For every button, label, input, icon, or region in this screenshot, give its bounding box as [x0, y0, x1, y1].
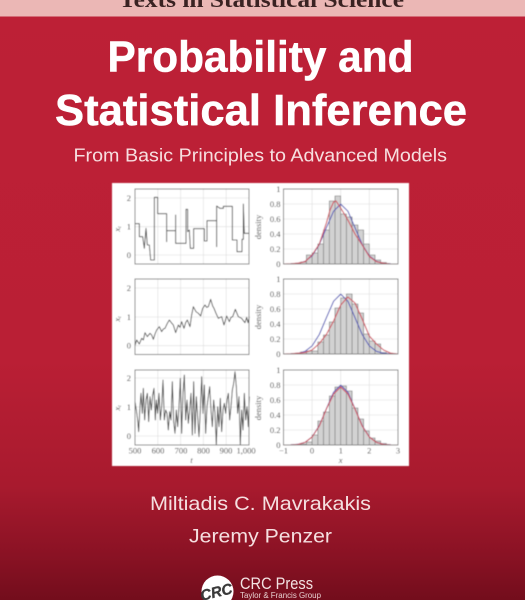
chart: time series 1: t	[117, 226, 123, 228]
chart: density 2: 0.8	[270, 289, 280, 299]
chart: density 2: 1	[276, 274, 280, 284]
subtitle: From Basic Principles to Advanced Models	[74, 146, 447, 166]
chart: time series 3: 1	[127, 402, 131, 412]
authors	[150, 493, 371, 547]
chart: density 1: 0.8	[270, 199, 280, 209]
chart: density 3: 0	[276, 440, 280, 450]
chart: density 3: x	[338, 455, 343, 465]
chart: density 3: 0.2	[270, 425, 280, 435]
chart: time series 3: 600	[152, 446, 164, 456]
chart: density 1: density	[253, 214, 263, 239]
chart: time series 3	[112, 370, 256, 465]
chart: density 1: 0.2	[270, 244, 280, 254]
title	[55, 32, 467, 135]
chart: density 3: 1	[276, 365, 280, 375]
chart: density 3: −1	[279, 446, 288, 456]
chart: time series 2: x	[112, 318, 122, 322]
chart: time series 1: 1	[127, 222, 131, 232]
chart: time series 2: 2	[127, 283, 131, 293]
chart: density 2: 0.4	[270, 319, 281, 329]
chart: density 2: 0.6	[270, 304, 280, 314]
authors: Miltiadis C. Mavrakakis	[150, 493, 371, 515]
chart: time series 3: t	[117, 405, 123, 407]
chart: density 1: 0.4	[270, 229, 281, 239]
chart: density 3: 3	[396, 446, 400, 456]
chart: time series 2: 1	[127, 312, 131, 322]
series banner	[0, 0, 525, 16]
chart: time series 2: t	[117, 316, 123, 318]
publisher logo	[199, 574, 322, 600]
chart: time series 3: x	[112, 407, 122, 411]
chart: density 2: density	[253, 304, 263, 329]
title: Statistical Inference	[55, 86, 467, 135]
chart: density 2	[253, 274, 398, 359]
chart: time series 3: 0	[127, 431, 131, 441]
chart: density 3: 0	[310, 446, 314, 456]
chart: density 3: 0.4	[270, 410, 281, 420]
panel: chart figure	[112, 183, 409, 466]
chart: density 3: density	[253, 395, 263, 420]
chart: density 3	[253, 365, 400, 465]
chart: time series 1	[112, 189, 249, 264]
chart: density 2: 0	[276, 349, 280, 359]
chart: density 3: 0.6	[270, 395, 280, 405]
publisher name: CRC Press	[240, 574, 313, 593]
chart: time series 1: 0	[127, 250, 131, 260]
chart: density 3: 0.8	[270, 380, 280, 390]
authors: Jeremy Penzer	[189, 525, 333, 547]
chart: time series 1: 2	[127, 193, 131, 203]
chart: density 3: 2	[367, 446, 371, 456]
chart: time series 3: 900	[220, 446, 232, 456]
chart: time series 3: 500	[129, 446, 141, 456]
publisher group: Taylor & Francis Group	[240, 591, 322, 600]
chart: density 1: 1	[276, 184, 280, 194]
chart: time series 3: 800	[197, 446, 210, 456]
chart: time series 3: 1,000	[236, 446, 256, 456]
chart: time series 2: 0	[127, 340, 131, 350]
chart: time series 2	[112, 279, 249, 354]
chart: density 2: 0.2	[270, 334, 280, 344]
chart: time series 3: 2	[127, 373, 131, 383]
chart: time series 3: t	[190, 455, 193, 465]
chart: time series 1: x	[112, 228, 122, 232]
chart: density 1: 0.6	[270, 214, 280, 224]
chart: density 1	[253, 184, 398, 269]
title: Probability and	[108, 32, 414, 82]
chart: density 1: 0	[276, 259, 280, 269]
chart: time series 3: 700	[175, 446, 187, 456]
chart: density 3: 1	[339, 446, 343, 456]
